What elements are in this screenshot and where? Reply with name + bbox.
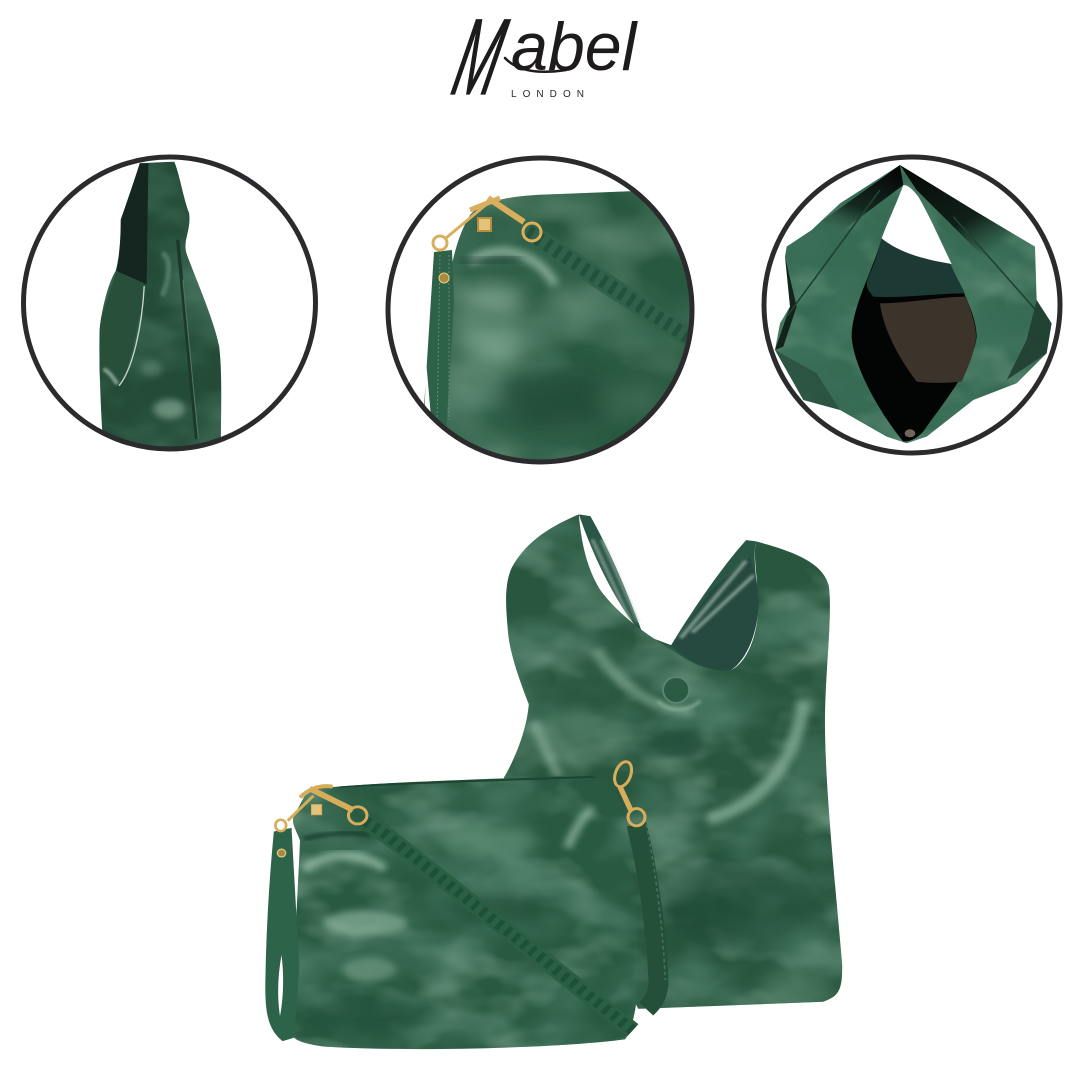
gloss xyxy=(708,701,804,819)
interior xyxy=(852,238,977,442)
teal lining xyxy=(867,238,965,297)
small crossbody bag xyxy=(285,769,646,1056)
crossbody strap xyxy=(528,232,700,345)
top shading xyxy=(824,165,904,228)
crossbody strap xyxy=(363,821,633,1030)
panel: clutch detail circle xyxy=(388,158,710,486)
panel: open interior circle xyxy=(764,157,1060,453)
gold hardware xyxy=(275,760,645,831)
handle gap xyxy=(882,185,952,264)
rear strap of clutch xyxy=(637,824,665,1009)
logo wordmark: M xyxy=(443,0,517,118)
wrist strap xyxy=(424,250,454,426)
logo tagline: LONDON xyxy=(511,89,584,100)
gold hardware xyxy=(433,198,541,250)
circle ring xyxy=(764,157,1060,453)
clutch close-up xyxy=(446,191,690,460)
magnetic snap xyxy=(658,677,700,709)
wrist loop xyxy=(265,828,299,1041)
open bag xyxy=(770,160,1057,447)
inner lining xyxy=(117,163,148,284)
product photo: bag set xyxy=(265,507,850,1056)
snap button xyxy=(905,429,915,437)
brown lining xyxy=(880,297,976,383)
circle ring xyxy=(388,158,692,462)
logo wordmark xyxy=(443,0,639,118)
bag side view xyxy=(99,162,222,446)
circle ring xyxy=(24,157,316,449)
logo: Mabel London xyxy=(443,0,639,118)
large hobo bag xyxy=(496,507,850,1016)
back straps xyxy=(579,514,760,671)
logo wordmark: abel xyxy=(511,10,639,85)
panel: side view circle xyxy=(24,157,316,455)
